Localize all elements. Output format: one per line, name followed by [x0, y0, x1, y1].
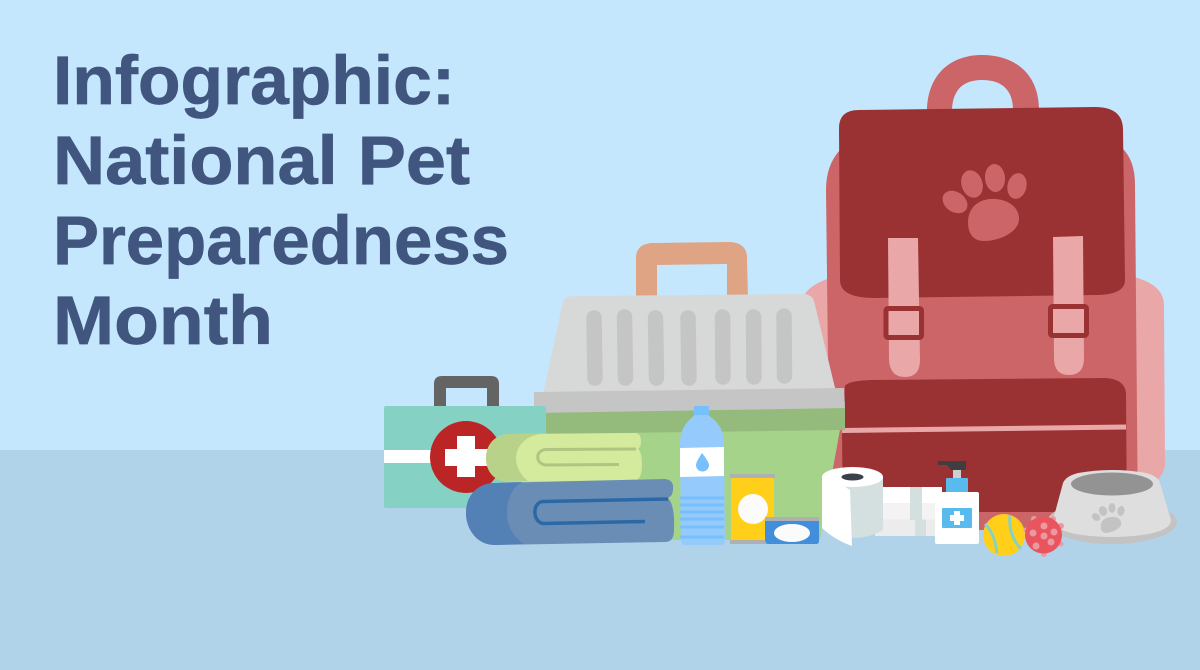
sanitizer label	[942, 508, 972, 528]
folded towels	[466, 433, 674, 545]
right buckle	[1050, 306, 1086, 336]
white plus	[950, 511, 964, 525]
icon: water drop	[696, 453, 709, 472]
roll hole	[842, 474, 864, 480]
kit handle	[434, 376, 499, 408]
bottle label	[680, 447, 724, 477]
bowl inner	[1071, 472, 1153, 496]
carrier rim shadow	[546, 408, 845, 434]
bottle ridges	[680, 498, 724, 537]
left buckle	[886, 308, 922, 338]
carrier lid rim	[534, 388, 845, 413]
bowl body	[1053, 470, 1171, 537]
carrier top shell	[543, 294, 836, 394]
first aid kit	[384, 376, 546, 508]
green towel	[486, 433, 642, 482]
white cross	[445, 436, 490, 477]
backpack left side pocket	[802, 278, 830, 400]
icon: paw print	[938, 163, 1029, 241]
red toy ball	[1024, 516, 1064, 557]
pump head	[938, 461, 966, 470]
water bottle	[680, 406, 725, 545]
kit stripe	[384, 450, 484, 463]
ball bumps	[1024, 516, 1064, 557]
backpack lower trim	[830, 512, 1134, 530]
right strap	[1053, 236, 1084, 375]
roll paper sheet	[822, 477, 852, 546]
pump stem	[953, 470, 961, 479]
pet carrier	[534, 242, 845, 540]
title: Preparedness	[53, 202, 509, 279]
title	[53, 42, 509, 359]
bowl shadow rim	[1047, 500, 1177, 544]
left strap	[888, 238, 920, 377]
backpack right side pocket	[1134, 277, 1165, 500]
tall pet food can	[730, 474, 775, 544]
title: National Pet	[53, 122, 470, 199]
backpack body	[826, 148, 1138, 530]
carrier base	[546, 402, 845, 540]
roll body	[822, 477, 883, 538]
toilet paper roll	[822, 467, 883, 546]
pet bowl	[1047, 470, 1177, 544]
kit case	[384, 406, 546, 508]
title: Infographic:	[53, 42, 455, 119]
front pocket	[842, 378, 1127, 530]
backpack flap	[839, 107, 1125, 298]
pocket zipper	[842, 424, 1126, 433]
bottle cap	[694, 406, 709, 416]
title: Month	[53, 282, 273, 359]
sanitizer collar	[946, 478, 968, 493]
backpack	[802, 55, 1165, 530]
red cross badge	[430, 421, 502, 493]
backpack handle	[927, 55, 1039, 112]
hand sanitizer	[935, 461, 979, 544]
carrier vents	[594, 316, 784, 378]
tennis ball	[983, 514, 1025, 556]
sanitizer bottle	[935, 492, 979, 544]
stack of gauze	[875, 487, 942, 536]
short pet food tin	[765, 517, 819, 544]
icon: bowl paw print	[1090, 503, 1126, 533]
carrier handle	[636, 242, 748, 298]
blue towel	[466, 479, 674, 545]
roll top	[822, 467, 883, 487]
bottle body	[680, 415, 725, 545]
